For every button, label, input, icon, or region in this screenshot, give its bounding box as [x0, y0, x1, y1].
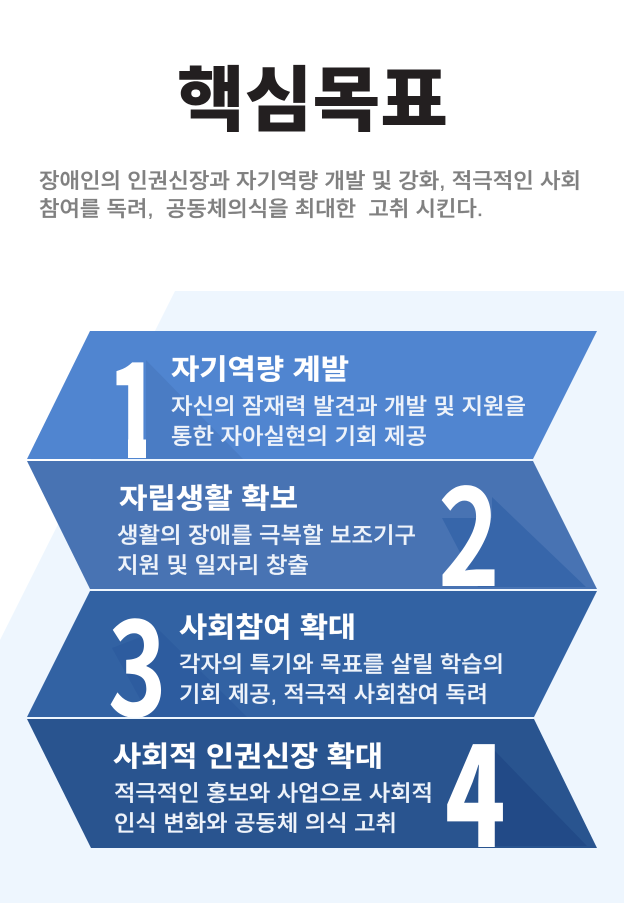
description: goal 4 — [114, 781, 433, 836]
heading: goal 2: 자립생활 확보 — [119, 483, 298, 514]
description: goal 2: 지원 및 일자리 창출 — [117, 553, 309, 578]
panel: goal 4 — [27, 687, 597, 887]
description: goal 2: 생활의 장애를 극복할 보조기구 — [117, 523, 416, 548]
intro text: 장애인의 인권신장과 자기역량 개발 및 강화, 적극적인 사회 — [39, 170, 581, 193]
description: goal 2 — [117, 523, 416, 578]
description: goal 3: 각자의 특기와 목표를 살릴 학습의 — [179, 652, 504, 677]
number 4: 4 — [445, 687, 506, 887]
panel: goal 3 — [27, 567, 597, 754]
title: 핵심목표 — [177, 62, 448, 141]
heading: goal 3: 사회참여 확대 — [179, 612, 356, 643]
number 1: 1 — [108, 310, 160, 496]
description: goal 3: 기회 제공, 적극적 사회참여 독려 — [179, 682, 488, 707]
background panel — [0, 291, 624, 903]
intro text: 참여를 독려, 공동체의식을 최대한 고취 시킨다. — [39, 198, 483, 221]
description: goal 1: 통한 자아실현의 기회 제공 — [171, 424, 427, 449]
number 3: 3 — [108, 567, 167, 754]
description: goal 1: 자신의 잠재력 발견과 개발 및 지원을 — [171, 394, 526, 419]
panel: goal 2 — [27, 431, 597, 625]
intro text — [39, 170, 581, 221]
heading: goal 1: 자기역량 계발 — [171, 354, 349, 385]
description: goal 1 — [171, 394, 526, 449]
description: goal 4: 적극적인 홍보와 사업으로 사회적 — [114, 781, 433, 806]
description: goal 4: 인식 변화와 공동체 의식 고취 — [114, 811, 397, 836]
heading: goal 4: 사회적 인권신장 확대 — [113, 741, 383, 772]
description: goal 3 — [179, 652, 504, 707]
number 2: 2 — [438, 431, 500, 625]
panel: goal 1 — [27, 331, 597, 459]
